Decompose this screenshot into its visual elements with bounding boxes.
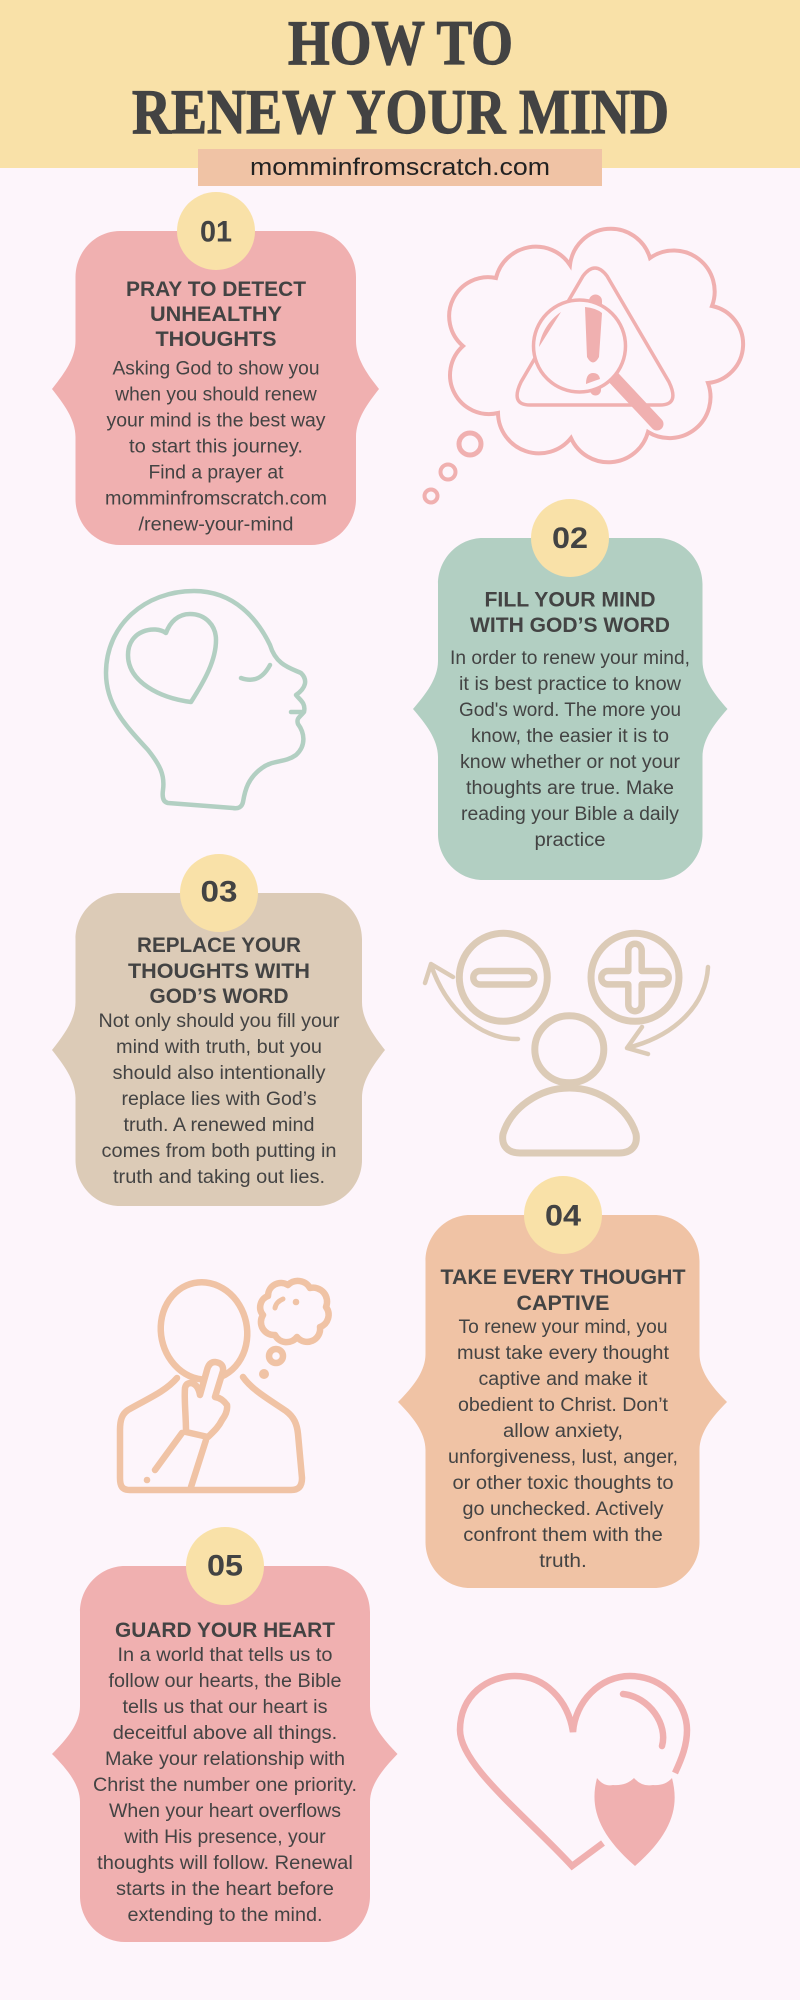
body text 3: truth. A renewed mind [124, 1115, 314, 1136]
number badge 05: 05 [207, 1550, 243, 1582]
body text 3: mind with truth, but you [116, 1037, 322, 1058]
heading 3: THOUGHTS WITH [128, 960, 310, 983]
icon: head with heart [106, 591, 305, 808]
title [132, 8, 669, 147]
body text 2: God's word. The more you [459, 700, 681, 721]
heading 2: FILL YOUR MIND [484, 589, 656, 612]
body text 4: obedient to Christ. Don’t [458, 1395, 669, 1416]
body text 5: thoughts will follow. Renewal [97, 1853, 353, 1874]
body text 5: starts in the heart before [116, 1879, 334, 1900]
number badge 01: 01 [200, 216, 232, 249]
body text 1 [105, 358, 327, 535]
body text 2: know whether or not your [460, 752, 681, 773]
heading 1: PRAY TO DETECT [126, 278, 306, 301]
body text 1: /renew-your-mind [138, 514, 294, 535]
website banner [198, 149, 602, 186]
number badge 01 [177, 192, 255, 270]
body text 4: go unchecked. Actively [462, 1499, 664, 1520]
body text 1: Find a prayer at [148, 462, 284, 483]
heading 1 [126, 278, 306, 351]
number badge 04: 04 [545, 1200, 581, 1233]
body text 3: comes from both putting in [102, 1141, 336, 1162]
card shape 2 [413, 538, 728, 880]
heading 2: WITH GOD’S WORD [470, 614, 670, 637]
icon: person thinking [120, 1274, 329, 1490]
body text 3: should also intentionally [112, 1063, 326, 1084]
body text 5 [93, 1645, 357, 1926]
number badge 03 [180, 854, 258, 932]
body text 1: your mind is the best way [106, 410, 326, 431]
number badge 03: 03 [200, 876, 238, 908]
number badge 05 [186, 1527, 264, 1605]
heading 1: THOUGHTS [156, 328, 276, 351]
body text 4: must take every thought [457, 1343, 670, 1364]
body text 5: deceitful above all things. [113, 1723, 337, 1744]
body text 4: To renew your mind, you [458, 1317, 668, 1338]
body text 2: it is best practice to know [459, 674, 681, 695]
body text 1: Asking God to show you [112, 358, 320, 379]
title: HOW TO [288, 8, 513, 78]
heading 2 [470, 589, 670, 637]
card shape 5 [52, 1566, 398, 1942]
body text 3: truth and taking out lies. [113, 1167, 325, 1188]
body text 1: momminfromscratch.com [105, 488, 327, 509]
heading 4: CAPTIVE [516, 1292, 610, 1315]
body text 5: tells us that our heart is [122, 1697, 328, 1718]
body text 3 [98, 1011, 340, 1188]
icon: thought cloud with warning and magnifier [424, 229, 743, 502]
number badge 02: 02 [552, 522, 588, 555]
heading 4 [440, 1266, 686, 1315]
panel: step 5 [52, 1527, 398, 1942]
number badge 04 [524, 1176, 602, 1254]
body text 2: reading your Bible a daily [461, 804, 680, 825]
icon: person choosing minus and plus [425, 933, 708, 1153]
body text 3: replace lies with God’s [122, 1089, 316, 1110]
number badge 02 [531, 499, 609, 577]
body text 4: truth. [539, 1551, 587, 1572]
heading 1: UNHEALTHY [150, 303, 282, 326]
body text 4: confront them with the [463, 1525, 663, 1546]
title: RENEW YOUR MIND [132, 77, 669, 147]
body text 4 [448, 1317, 678, 1572]
website banner: momminfromscratch.com [250, 154, 550, 181]
card shape 3 [52, 893, 385, 1206]
body text 1: when you should renew [114, 384, 317, 405]
body text 2: practice [534, 830, 606, 851]
panel: step 3 [52, 854, 385, 1206]
panel: step 4 [398, 1176, 727, 1588]
heading 3: GOD’S WORD [150, 985, 288, 1008]
body text 2: In order to renew your mind, [450, 648, 690, 669]
icon: heart with shield [460, 1676, 687, 1866]
body text 2 [450, 648, 690, 851]
body text 5: follow our hearts, the Bible [108, 1671, 342, 1692]
body text 1: to start this journey. [129, 436, 303, 457]
card shape 1 [52, 231, 379, 545]
body text 4: unforgiveness, lust, anger, [448, 1447, 678, 1468]
body text 5: When your heart overflows [109, 1801, 341, 1822]
panel: step 2 [413, 499, 728, 880]
header band [0, 0, 800, 168]
panel: step 1 [52, 192, 379, 545]
body text 4: captive and make it [478, 1369, 648, 1390]
body text 5: In a world that tells us to [118, 1645, 332, 1666]
body text 5: Christ the number one priority. [93, 1775, 357, 1796]
body text 5: with His presence, your [123, 1827, 326, 1848]
body text 5: extending to the mind. [128, 1905, 322, 1926]
heading 5: GUARD YOUR HEART [115, 1619, 335, 1642]
heading 4: TAKE EVERY THOUGHT [440, 1266, 686, 1289]
body text 3: Not only should you fill your [98, 1011, 340, 1032]
body text 4: or other toxic thoughts to [452, 1473, 674, 1494]
body text 4: allow anxiety, [503, 1421, 623, 1442]
heading 3: REPLACE YOUR [137, 934, 301, 957]
body text 2: know, the easier it is to [471, 726, 669, 747]
body text 5: Make your relationship with [105, 1749, 345, 1770]
card shape 4 [398, 1215, 727, 1588]
body text 2: thoughts are true. Make [466, 778, 674, 799]
heading 3 [128, 934, 310, 1008]
